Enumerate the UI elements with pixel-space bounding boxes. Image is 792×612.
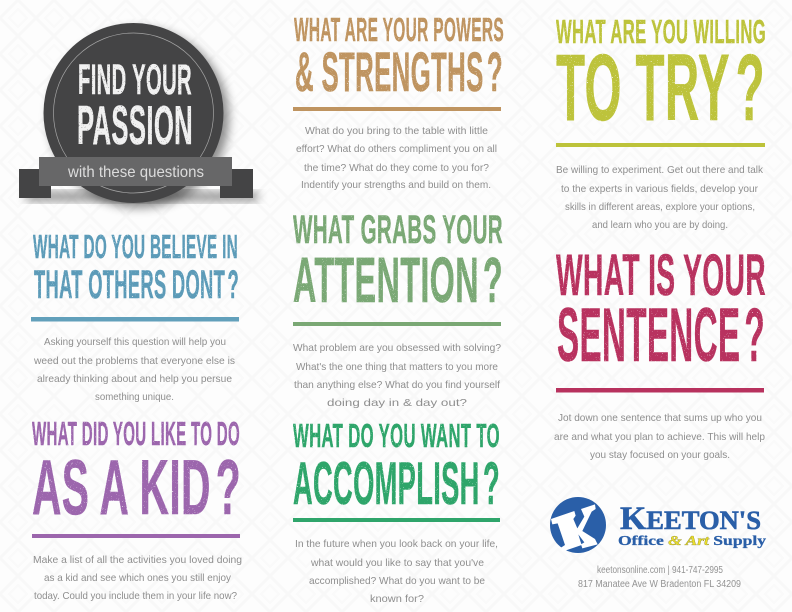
heading: ATTENTION ? — [293, 244, 503, 316]
body text — [33, 554, 242, 602]
badge: find your passion — [19, 23, 258, 208]
panel: what do you want to accomplish — [293, 417, 500, 605]
text: WHAT DID YOU LIKE TO DO — [32, 415, 240, 452]
heading — [556, 243, 766, 378]
body text: weed out the problems that everyone else is — [33, 355, 235, 367]
panel: what did you like to do as a kid — [32, 415, 242, 602]
body text — [295, 538, 498, 605]
heading — [33, 229, 239, 307]
icon: k emblem — [550, 497, 606, 553]
body text — [554, 412, 765, 461]
body text: What do you bring to the table with little — [305, 125, 488, 137]
body text — [556, 164, 764, 231]
body text: than anything else? What do you find yourself — [294, 379, 500, 391]
body text: are and what you plan to achieve. This will help — [554, 431, 765, 443]
heading — [32, 415, 241, 531]
ribbon: with these questions — [39, 157, 232, 186]
body text — [293, 342, 501, 409]
body text: to the experts in various fields, develop your — [561, 183, 758, 195]
contact details: 817 Manatee Ave W Bradenton FL 34209 — [578, 579, 741, 590]
ribbon right tail — [220, 169, 253, 198]
panel: what grabs your attention — [293, 208, 503, 409]
panel: what are you willing to try — [556, 13, 766, 231]
heading: & STRENGTHS ? — [295, 40, 503, 103]
heading — [293, 208, 503, 316]
ribbon: with these questions: with these questions — [67, 164, 204, 181]
panel: what do you believe in — [31, 229, 239, 403]
badge: find your passion: FIND YOUR — [78, 56, 192, 104]
ribbon left tail — [19, 169, 51, 198]
body text: Asking yourself this question will help you — [44, 336, 226, 348]
body text: effort? What do others compliment you on all — [296, 143, 497, 155]
body text: accomplished? What do you want to be — [309, 575, 485, 587]
body text: Make a list of all the activities you loved doing — [33, 554, 242, 566]
body text: doing day in & day out? — [327, 397, 467, 409]
heading: WHAT DO YOU WANT TO — [293, 417, 500, 454]
body text: known for? — [370, 593, 424, 605]
body text: something unique. — [95, 391, 174, 403]
body text: today. Could you include them in your life now? — [34, 590, 237, 602]
title: find your passion — [77, 56, 193, 156]
body text: Be willing to experiment. Get out there and talk — [556, 164, 764, 176]
heading — [294, 11, 504, 103]
body text: the time? What do they come to you for? — [304, 162, 489, 174]
text: THAT OTHERS DONT ? — [34, 263, 239, 307]
heading: AS A KID ? — [32, 443, 241, 531]
logo: keeton's office and art supply — [550, 497, 766, 590]
body text: What's the one thing that matters to you more — [296, 361, 498, 373]
body text: In the future when you look back on your life, — [295, 538, 498, 550]
body text: and learn who you are by doing. — [592, 219, 728, 231]
tagline: Office & Art Supply — [618, 534, 766, 549]
body text: already thinking about and help you persue — [37, 373, 232, 385]
body text: you stay focused on your goals. — [590, 449, 730, 461]
body text: as a kid and see which ones you still enjoy — [44, 572, 232, 584]
contact details: keetonsonline.com | 941-747-2995 — [597, 565, 723, 576]
body text — [296, 125, 497, 191]
badge: find your passion: PASSION — [77, 94, 193, 156]
heading — [293, 417, 500, 517]
panel: powers and strengths — [293, 11, 504, 191]
body text: Jot down one sentence that sums up who you — [558, 412, 762, 424]
heading: ACCOMPLISH ? — [293, 450, 500, 517]
body text: what would you like to say that you've — [310, 557, 484, 569]
body text: skills in different areas, explore your options, — [565, 201, 755, 213]
body text: Indentify your strengths and build on them. — [301, 179, 491, 191]
heading: WHAT GRABS YOUR — [293, 208, 503, 252]
body text: What problem are you obsessed with solving? — [293, 342, 501, 354]
panel: what is your sentence — [554, 243, 766, 461]
body text — [33, 336, 235, 403]
text: WHAT ARE YOUR POWERS — [294, 11, 504, 48]
text: WHAT DO YOU BELIEVE IN — [33, 229, 238, 266]
contact details — [578, 565, 741, 590]
wordmark: KEETON'S — [620, 501, 761, 537]
